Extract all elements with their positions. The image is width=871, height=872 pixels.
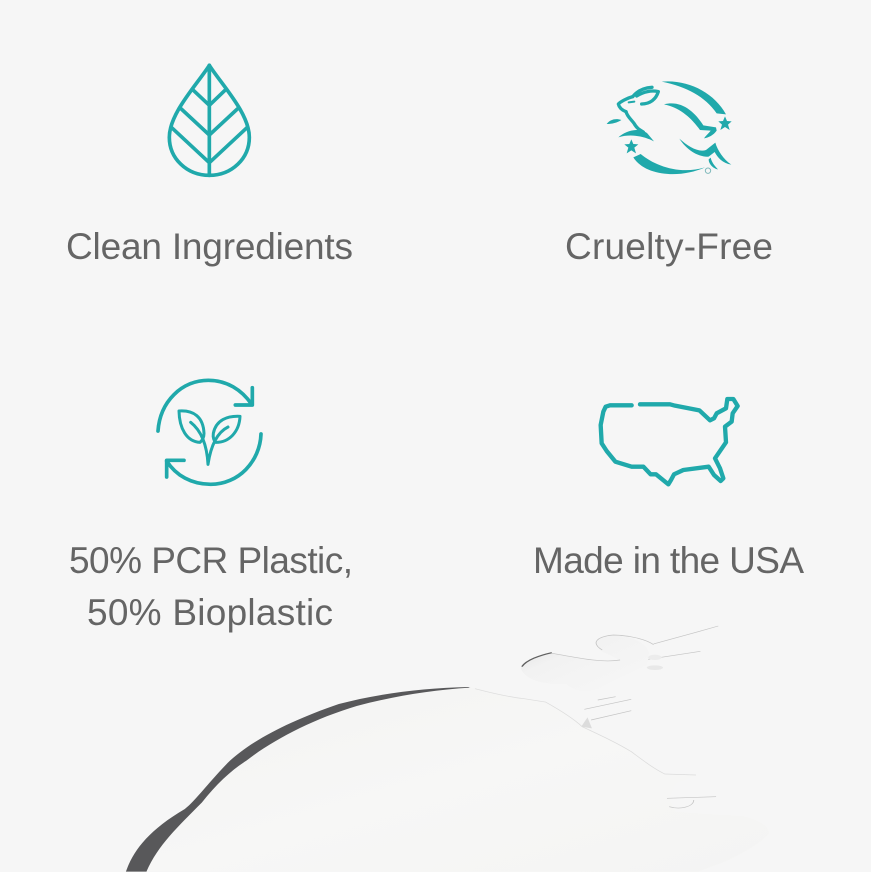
label: 50% PCR Plastic, 50% Bioplastic: 50% Bioplastic bbox=[87, 592, 333, 633]
label: Clean Ingredients: Clean Ingredients bbox=[66, 226, 353, 267]
small splatter bbox=[521, 626, 718, 808]
label: 50% PCR Plastic, 50% Bioplastic: 50% PCR Plastic, bbox=[69, 540, 353, 581]
dark edge of the smear bbox=[126, 687, 475, 872]
icon: leaping rabbit bbox=[607, 81, 732, 174]
label: Made in the USA: Made in the USA bbox=[533, 540, 804, 581]
label: 50% PCR Plastic, 50% Bioplastic bbox=[69, 540, 353, 633]
label: Cruelty-Free: Cruelty-Free bbox=[565, 226, 773, 267]
product swatch: cream smear bbox=[126, 626, 769, 872]
main cream body bbox=[146, 688, 769, 872]
icon: recycling arrows with sprout bbox=[158, 380, 261, 484]
icon: USA map outline bbox=[601, 399, 738, 484]
icon: leaf drop bbox=[169, 65, 249, 175]
